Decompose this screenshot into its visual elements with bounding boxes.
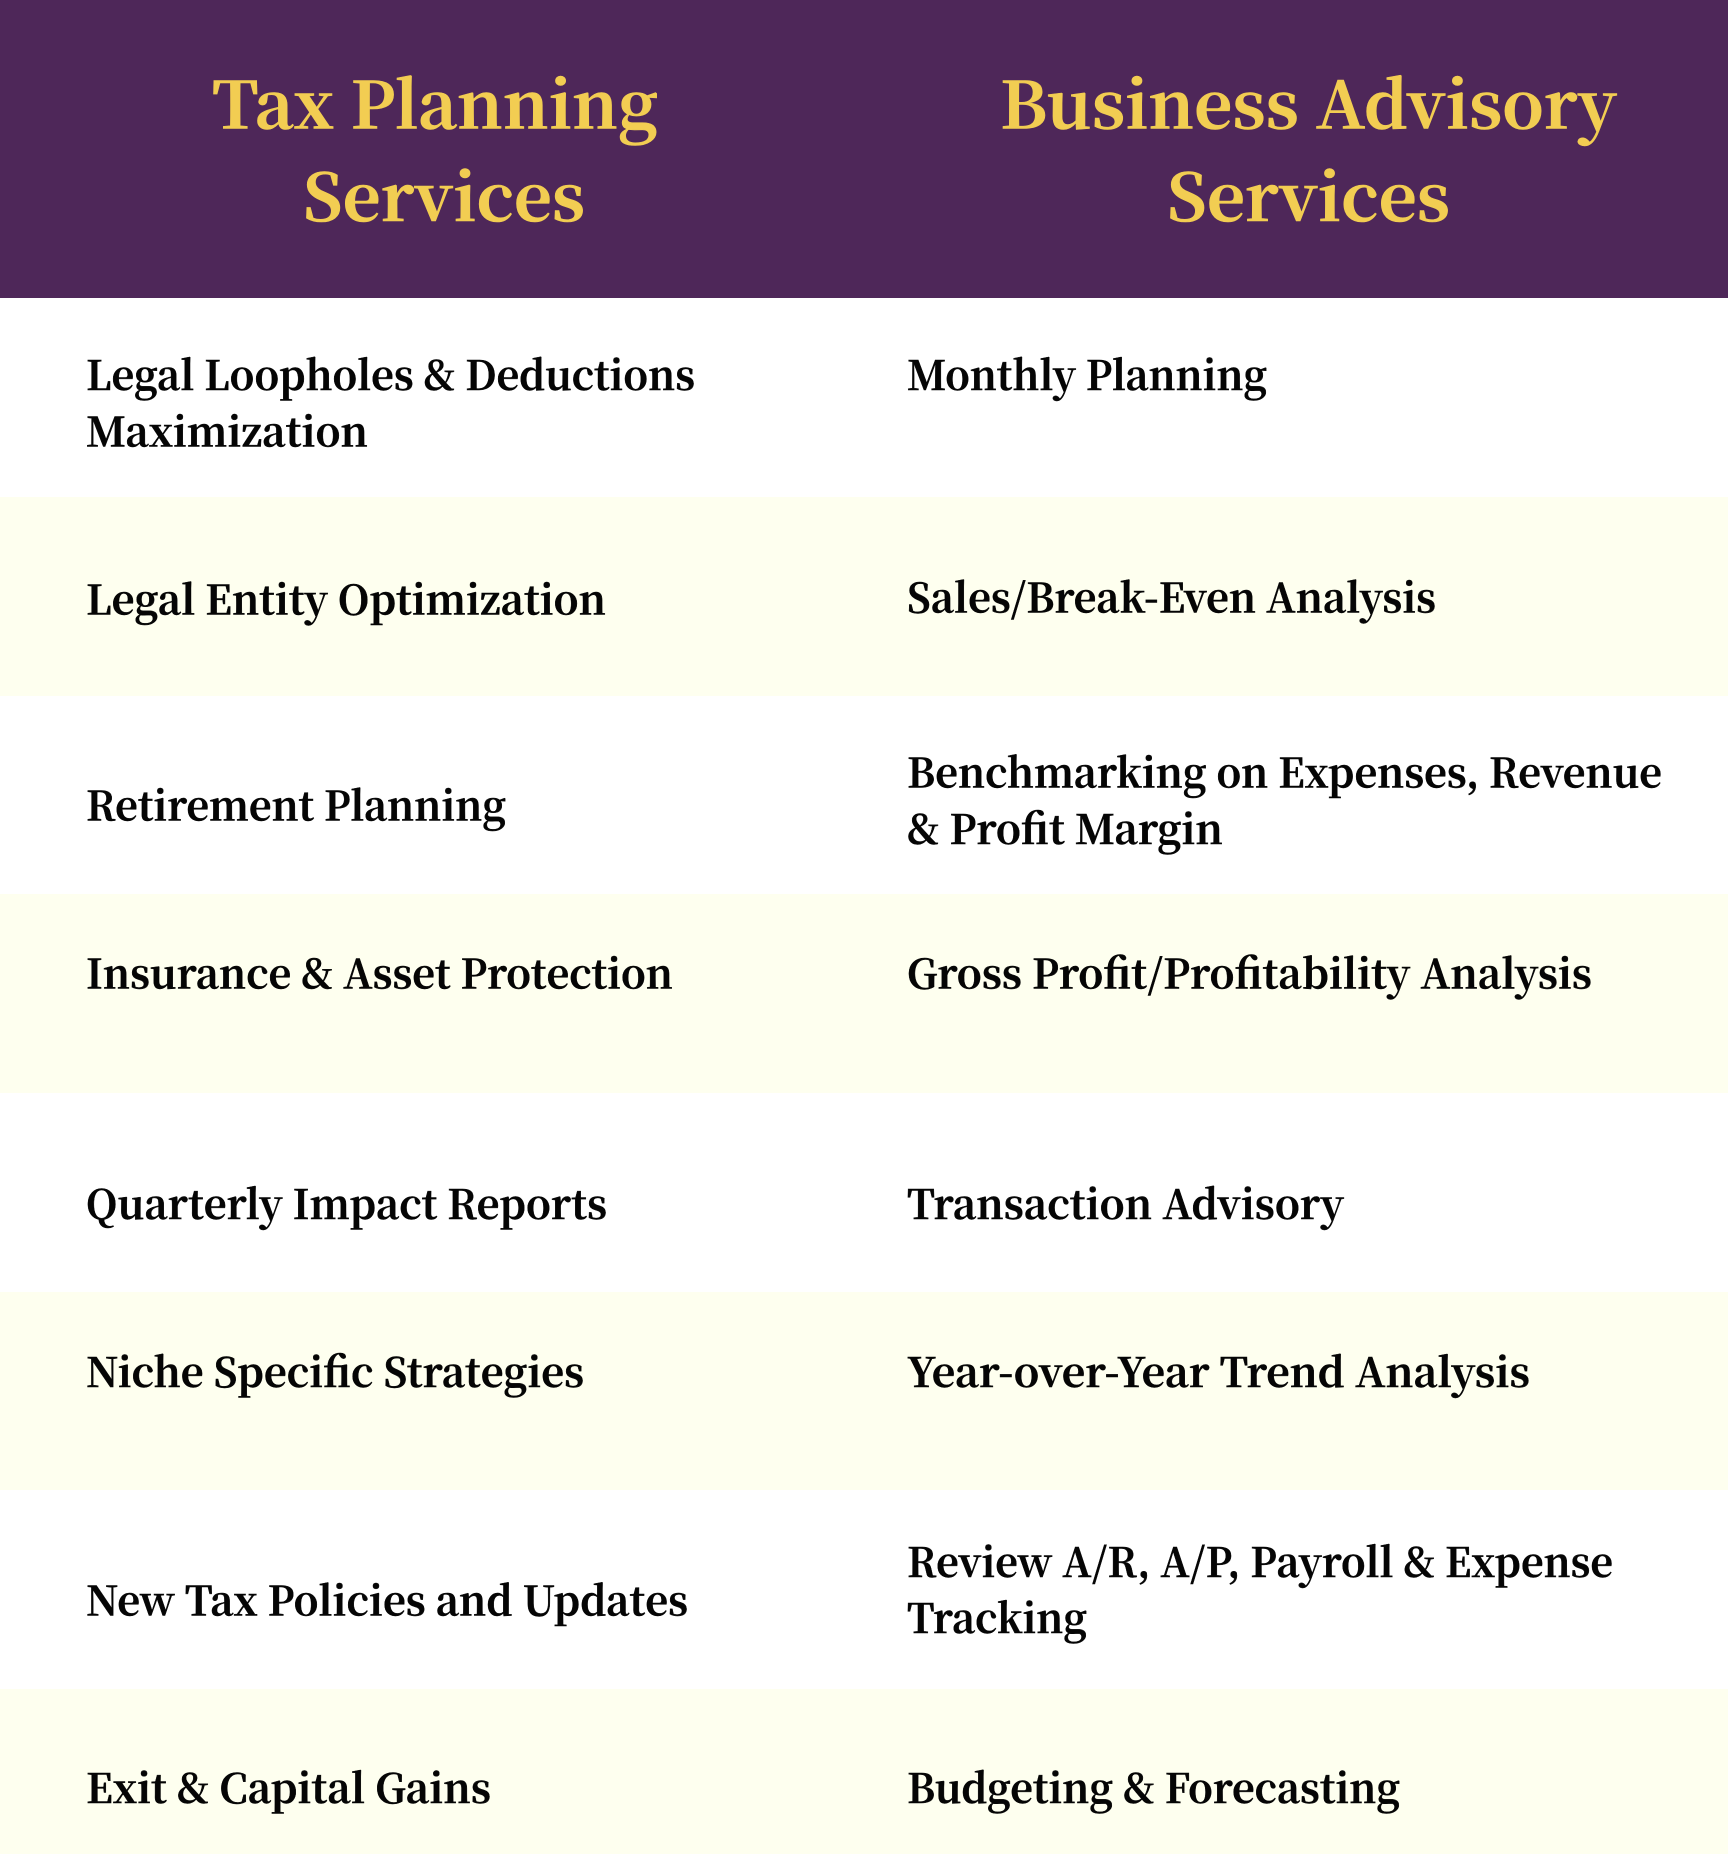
item: retirement planning: Retirement Planning — [86, 774, 506, 832]
item: year-over-year trend analysis: Year-over-Year Trend Analysis — [907, 1340, 1530, 1399]
row 1 — [0, 298, 1728, 497]
row 5 — [0, 1093, 1728, 1292]
item: legal loopholes: Maximization — [86, 400, 368, 458]
item: budgeting and forecasting: Budgeting & Forecasting — [907, 1756, 1400, 1815]
heading: Tax Planning Services — [212, 54, 658, 240]
item: legal loopholes: Legal Loopholes & Deductions — [86, 343, 695, 402]
header band — [0, 0, 1728, 298]
row 7 — [0, 1490, 1728, 1689]
item: quarterly impact reports: Quarterly Impact Reports — [86, 1172, 607, 1231]
item: monthly planning: Monthly Planning — [907, 343, 1267, 402]
item: legal entity optimization: Legal Entity Optimization — [86, 568, 606, 626]
item: niche specific strategies: Niche Specific Strategies — [86, 1340, 584, 1399]
item: benchmarking: & Profit Margin — [907, 797, 1223, 856]
row 4 — [0, 894, 1728, 1093]
item: legal loopholes — [86, 343, 695, 458]
row 3 — [0, 696, 1728, 894]
heading: Business Advisory Services: Services — [1167, 146, 1450, 240]
item: benchmarking — [907, 740, 1662, 856]
heading: Business Advisory Services — [1000, 54, 1617, 240]
item: review a/r a/p payroll — [907, 1530, 1613, 1645]
row 6 — [0, 1292, 1728, 1490]
item: review a/r a/p payroll: Tracking — [907, 1586, 1087, 1645]
item: sales break-even analysis: Sales/Break-Even Analysis — [907, 566, 1436, 624]
row 2 — [0, 497, 1728, 696]
item: insurance and asset protection: Insurance & Asset Protection — [86, 942, 673, 1000]
item: gross profit analysis: Gross Profit/Profitability Analysis — [907, 942, 1592, 1000]
item: review a/r a/p payroll: Review A/R, A/P, Payroll & Expense — [907, 1530, 1613, 1589]
heading: Business Advisory Services: Business Advisory — [1000, 54, 1617, 148]
item: new tax policies: New Tax Policies and Updates — [86, 1568, 688, 1628]
item: benchmarking: Benchmarking on Expenses, Revenue — [907, 740, 1662, 800]
row 8 — [0, 1689, 1728, 1854]
heading: Tax Planning Services: Services — [303, 146, 585, 240]
heading: Tax Planning Services: Tax Planning — [212, 54, 658, 148]
item: exit and capital gains: Exit & Capital Gains — [86, 1756, 491, 1815]
item: transaction advisory: Transaction Advisory — [907, 1172, 1344, 1231]
